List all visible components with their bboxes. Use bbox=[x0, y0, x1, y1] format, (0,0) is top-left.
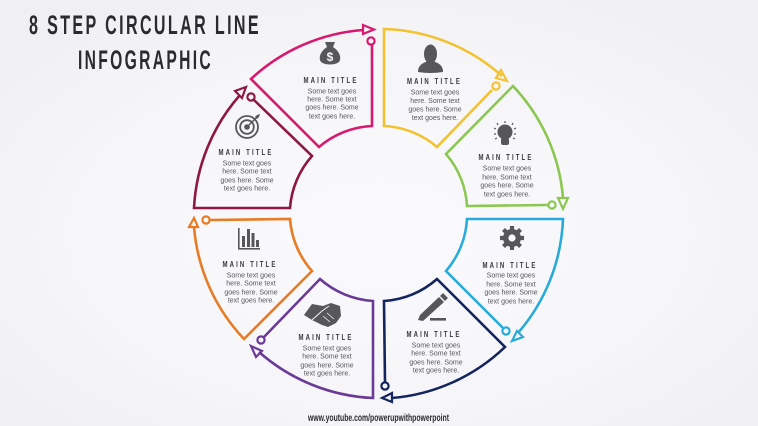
step text: here. Some text bbox=[486, 282, 536, 288]
title bbox=[29, 10, 261, 75]
step text: Some text goes bbox=[227, 272, 276, 280]
segment outline bbox=[194, 219, 312, 339]
arrow head bbox=[558, 198, 568, 209]
step text: goes here. Some bbox=[224, 290, 278, 296]
step text bbox=[409, 342, 463, 374]
step heading: MAIN TITLE bbox=[407, 76, 462, 86]
step text: goes here. Some bbox=[408, 106, 462, 114]
segment outline bbox=[259, 279, 373, 398]
step text: text goes here. bbox=[413, 368, 459, 374]
step text: here. Some text bbox=[302, 354, 352, 360]
icon: light bulb bbox=[494, 121, 516, 145]
step text bbox=[480, 166, 534, 198]
step heading: MAIN TITLE bbox=[218, 147, 274, 157]
step text: text goes here. bbox=[484, 192, 530, 198]
step text: goes here. Some bbox=[409, 360, 463, 366]
step heading: MAIN TITLE bbox=[298, 332, 354, 342]
panel: step 4 navy bbox=[381, 279, 505, 402]
start circle bbox=[502, 327, 510, 335]
step text: here. Some text bbox=[410, 98, 460, 105]
step text: goes here. Some bbox=[300, 362, 354, 370]
arrow head bbox=[235, 87, 246, 98]
step text: text goes here. bbox=[488, 298, 534, 306]
step text bbox=[408, 90, 462, 122]
step text: Some text goes bbox=[412, 342, 461, 350]
step text: Some text goes bbox=[487, 272, 536, 280]
start circle bbox=[247, 93, 255, 101]
step text: Some text goes bbox=[223, 160, 272, 168]
segment outline bbox=[384, 279, 505, 398]
arrow head bbox=[512, 331, 523, 341]
step text: here. Some text bbox=[307, 96, 357, 104]
panel: step 1 yellow bbox=[384, 29, 507, 147]
step heading: MAIN TITLE bbox=[304, 75, 358, 85]
start circle bbox=[381, 382, 389, 390]
step text: Some text goes bbox=[308, 88, 357, 96]
segment outline bbox=[446, 86, 563, 206]
panel: step 8 pink bbox=[251, 25, 375, 147]
icon: money bag: $ bbox=[327, 50, 334, 64]
icon: target bbox=[236, 114, 260, 138]
step text: text goes here. bbox=[228, 298, 274, 304]
title: 8 STEP CIRCULAR LINE bbox=[29, 10, 261, 40]
step text: text goes here. bbox=[309, 114, 355, 120]
step text: here. Some text bbox=[222, 168, 272, 176]
panel: step 3 blue bbox=[446, 219, 563, 341]
title: INFOGRAPHIC bbox=[78, 45, 213, 75]
step text bbox=[300, 346, 354, 378]
arrow head bbox=[496, 70, 507, 81]
step heading: MAIN TITLE bbox=[406, 329, 462, 339]
panel: step 6 orange bbox=[189, 216, 312, 339]
start circle bbox=[202, 216, 210, 224]
step text: text goes here. bbox=[412, 115, 458, 122]
step text: here. Some text bbox=[411, 350, 461, 358]
panel: step 2 green bbox=[446, 86, 568, 209]
step heading: MAIN TITLE bbox=[478, 152, 534, 162]
icon: bar chart bbox=[238, 228, 260, 250]
segment outline bbox=[446, 219, 563, 333]
step text bbox=[484, 272, 538, 306]
step text bbox=[224, 272, 278, 304]
step text: here. Some text bbox=[482, 174, 532, 182]
step text: here. Some text bbox=[226, 280, 276, 288]
step text: Some text goes bbox=[303, 346, 352, 352]
arrow head bbox=[382, 393, 392, 402]
start circle bbox=[548, 201, 556, 209]
start circle bbox=[367, 37, 375, 45]
segment outline bbox=[251, 30, 372, 147]
segment outline bbox=[384, 29, 502, 147]
step text: goes here. Some bbox=[480, 182, 534, 190]
start circle bbox=[257, 336, 265, 344]
icon: gear bbox=[500, 226, 524, 250]
segment outline bbox=[194, 95, 312, 208]
step text bbox=[305, 88, 359, 120]
arrow head bbox=[189, 218, 198, 227]
step text: text goes here. bbox=[304, 370, 350, 378]
step text: Some text goes bbox=[411, 90, 460, 96]
icon: pencil bbox=[418, 293, 448, 321]
step text: text goes here. bbox=[224, 186, 270, 192]
start circle bbox=[492, 82, 500, 90]
step heading: MAIN TITLE bbox=[222, 259, 278, 269]
step text bbox=[220, 160, 274, 192]
panel: step 7 maroon bbox=[194, 87, 312, 208]
step text: goes here. Some bbox=[220, 178, 274, 184]
step text: goes here. Some bbox=[484, 290, 538, 296]
step text: goes here. Some bbox=[305, 104, 359, 112]
arrow head bbox=[363, 25, 374, 34]
step heading: MAIN TITLE bbox=[482, 260, 538, 270]
step text: Some text goes bbox=[483, 166, 532, 172]
footer url: www.youtube.com/powerupwithpowerpoint bbox=[307, 412, 449, 424]
arrow head bbox=[251, 346, 262, 357]
icon: person bbox=[418, 44, 443, 73]
panel: step 5 purple bbox=[251, 279, 373, 398]
icon: handshake bbox=[304, 303, 341, 327]
